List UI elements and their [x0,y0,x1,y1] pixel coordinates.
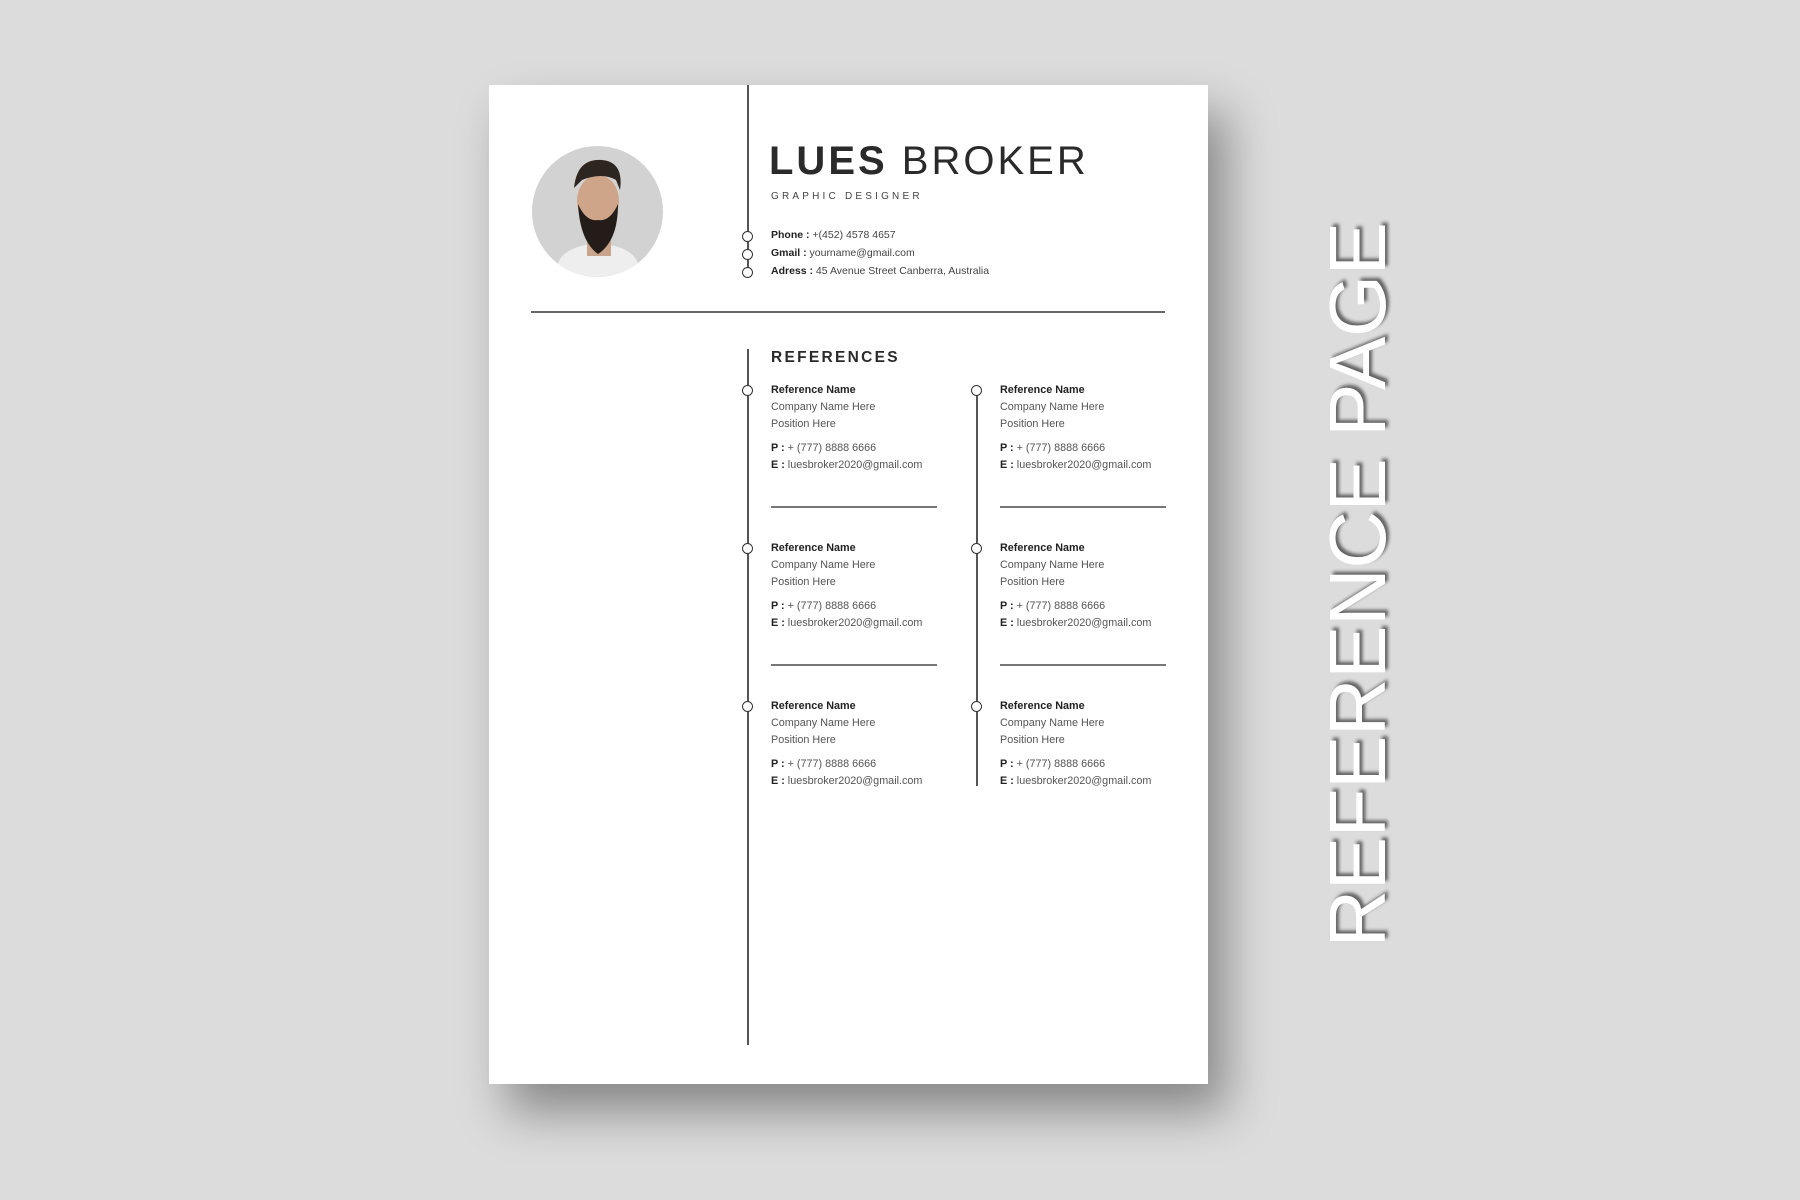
references grid: E : luesbroker2020@gmail.com [771,617,922,629]
references grid: E : luesbroker2020@gmail.com [1000,775,1151,787]
name: LUES BROKER [769,139,1089,183]
timeline line main [747,349,748,1045]
references grid: E : luesbroker2020@gmail.com [771,775,922,787]
references grid: E : luesbroker2020@gmail.com [1000,459,1151,471]
job title: GRAPHIC DESIGNER [771,191,923,202]
references grid: P : + (777) 8888 6666 [1000,600,1105,612]
references grid: Position Here [771,418,836,430]
references grid: P : + (777) 8888 6666 [1000,758,1105,770]
references grid: E : luesbroker2020@gmail.com [1000,617,1151,629]
references grid: P : + (777) 8888 6666 [1000,442,1105,454]
references grid: Company Name Here [1000,401,1104,413]
contact list: Gmail : yourname@gmail.com [771,247,915,259]
timeline line column 2 [976,390,978,786]
header divider [531,311,1165,312]
references heading: REFERENCES [771,349,900,366]
references grid: P : + (777) 8888 6666 [771,600,876,612]
references grid: Reference Name [1000,384,1085,396]
contact list [742,229,990,278]
references grid: Company Name Here [771,717,875,729]
references grid: Reference Name [1000,542,1085,554]
references grid: Reference Name [771,700,856,712]
references grid: E : luesbroker2020@gmail.com [771,459,922,471]
references grid: Company Name Here [1000,559,1104,571]
references grid: Company Name Here [771,401,875,413]
references grid: Reference Name [771,384,856,396]
contact list: Phone : +(452) 4578 4657 [771,229,896,241]
vertical title: REFERENCE PAGE [1313,222,1402,948]
contact list: Adress : 45 Avenue Street Canberra, Australia [771,265,989,277]
references grid: Position Here [771,734,836,746]
page [489,85,1208,1084]
photo [532,146,663,277]
references grid: Reference Name [771,542,856,554]
references grid: Position Here [771,576,836,588]
references grid: P : + (777) 8888 6666 [771,758,876,770]
timeline line top [747,85,748,275]
references grid: Position Here [1000,734,1065,746]
references grid: Company Name Here [771,559,875,571]
references grid: Position Here [1000,418,1065,430]
references grid: Company Name Here [1000,717,1104,729]
references grid: P : + (777) 8888 6666 [771,442,876,454]
references grid: Reference Name [1000,700,1085,712]
references grid [742,384,1166,787]
references grid: Position Here [1000,576,1065,588]
